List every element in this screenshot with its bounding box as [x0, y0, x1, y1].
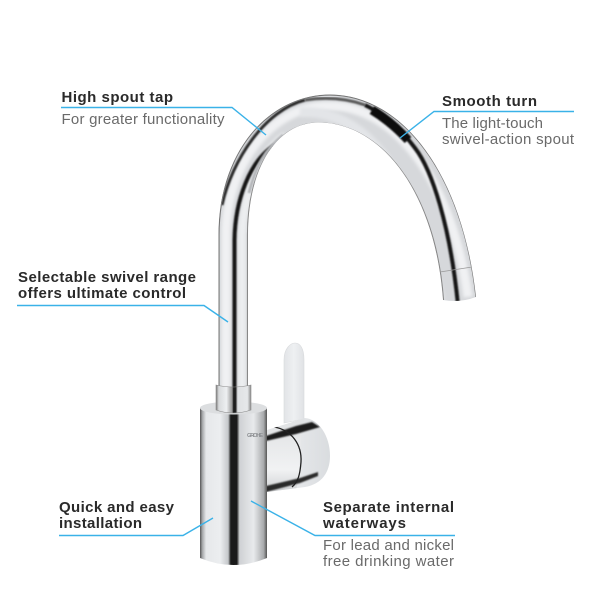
handle cylinder: [267, 418, 330, 492]
callout: smooth turn: [400, 93, 575, 148]
callout: swivel range: [17, 269, 228, 322]
callout: quick installation: installation: [59, 515, 142, 532]
spout tube: [218, 94, 476, 387]
callout: swivel range: offers ultimate control: [18, 285, 186, 302]
callout: swivel range: Selectable swivel range: [18, 269, 196, 286]
handle lever: [284, 343, 304, 423]
callout: quick installation: Quick and easy: [59, 499, 175, 516]
callout: smooth turn: The light-touch: [442, 115, 543, 132]
callout: separate waterways: free drinking water: [323, 553, 454, 570]
callout: separate waterways: [251, 499, 455, 570]
callout: high spout tap: [61, 89, 266, 135]
callout: quick installation: [59, 499, 213, 536]
callout: high spout tap: For greater functionality: [62, 111, 225, 128]
callout: separate waterways: For lead and nickel: [323, 537, 454, 554]
callout: separate waterways: Separate internal: [323, 499, 454, 516]
logo: GROHE: [247, 433, 263, 439]
base body: [200, 408, 267, 565]
callout: separate waterways: waterways: [322, 515, 406, 532]
collar: [216, 385, 251, 413]
callout: smooth turn: swivel-action spout: [442, 131, 575, 148]
callout: smooth turn: Smooth turn: [442, 93, 537, 110]
faucet illustration: [200, 85, 490, 565]
callout: high spout tap: High spout tap: [62, 89, 173, 106]
